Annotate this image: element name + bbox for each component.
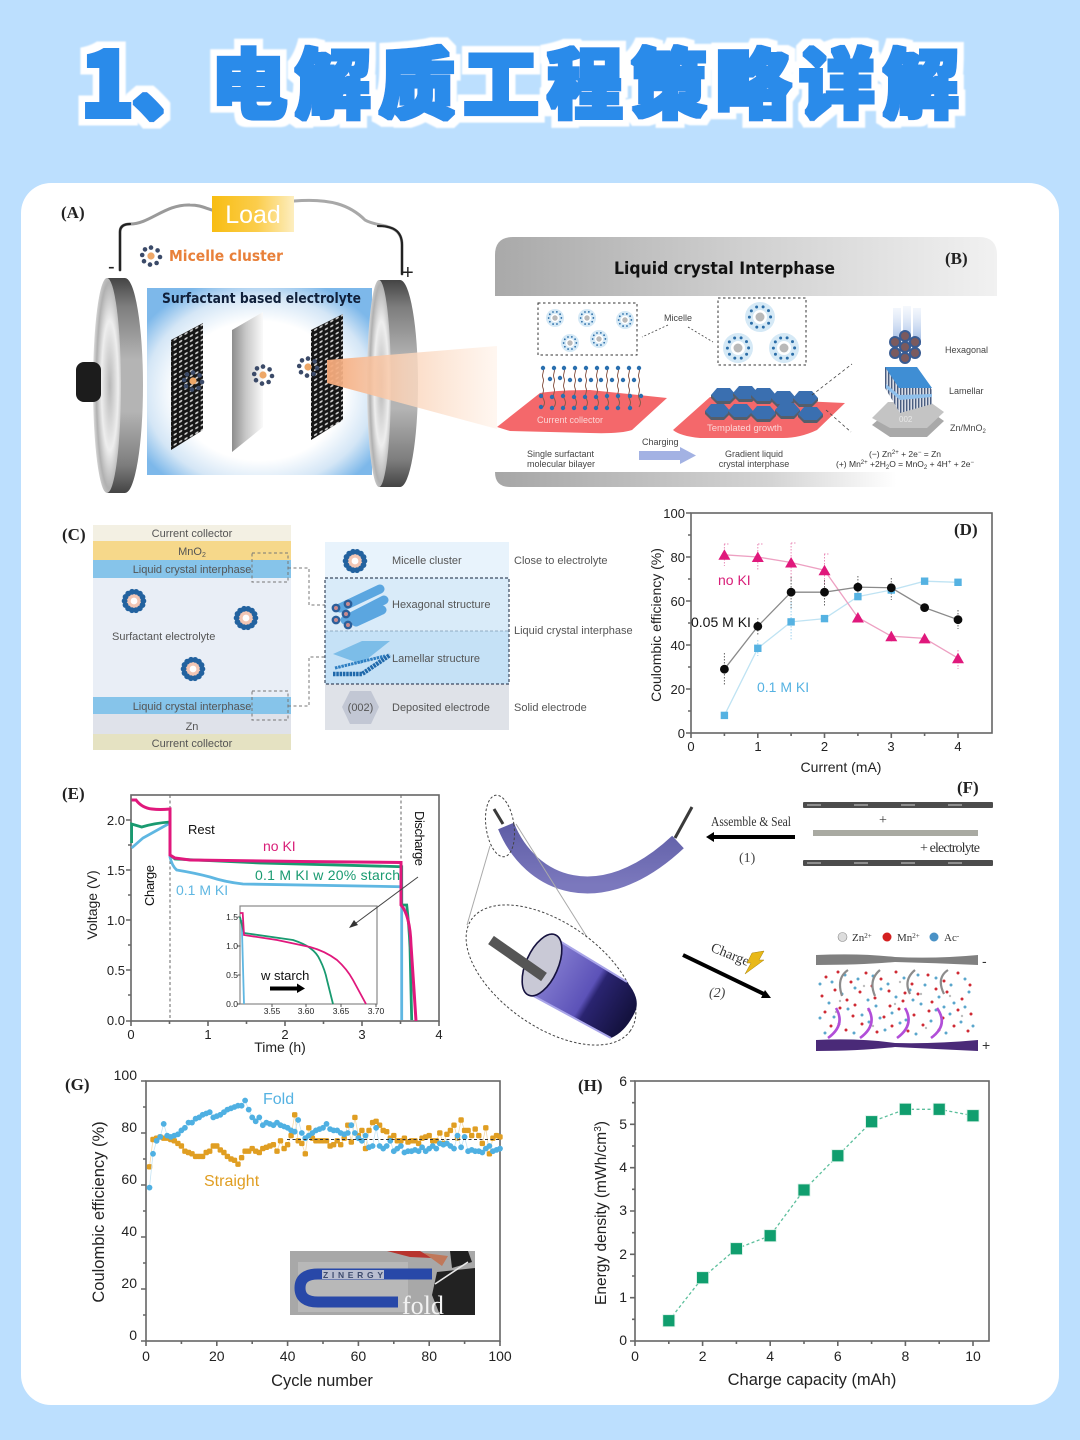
tick labels: 3 [887,739,895,754]
table row labels: Deposited electrode [392,702,490,714]
layered cell stack [93,525,291,750]
structure labels [945,345,988,435]
inset photo [290,1251,475,1320]
tick labels: 2.0 [107,813,125,828]
tick labels: 6 [834,1348,842,1364]
plate signs: - [982,953,987,969]
x axis title: Time (h) [254,1039,306,1055]
micelle label and pointers: Micelle [664,313,692,323]
tick labels: 10 [965,1348,981,1364]
inset chart: 0.0 [226,999,238,1009]
layered cell stack: MnO [178,546,202,558]
panel A: battery schematic [61,196,497,493]
large micelle box [718,298,806,365]
load box [212,196,294,232]
ion cloud [820,972,973,1034]
electrode equations: (−) Zn [869,449,892,459]
y axis title: Coulombic efficiency (%) [90,1121,108,1303]
reactant labels: + electrolyte [920,841,980,856]
labels: Charge [142,865,157,906]
cathode sheet [311,314,343,440]
structure labels: Hexagonal [945,345,988,355]
assemble arrow [706,815,795,866]
tick labels: 20 [671,682,685,697]
hexagonal crystals [705,386,823,423]
reference dashed line [287,1138,500,1140]
series labels: 0.05 M KI [691,614,751,630]
micelle cluster legend [140,245,284,267]
left knob [76,362,101,402]
electrode equations: = Zn [921,449,941,459]
inset chart: w starch [260,968,309,983]
circuit wires [120,200,402,274]
electrode equations: + [948,460,952,466]
ion legend: - [957,932,960,940]
layered cell stack: Current collector [152,738,233,750]
side labels: Solid electrode [514,702,587,714]
tick labels: 40 [671,638,685,653]
tick labels: 80 [671,550,685,565]
panel label C: (C) [62,525,86,544]
ion legend: Zn [852,932,864,944]
tick labels: 0 [687,739,695,754]
ion legend [838,932,960,944]
tick labels: 0 [129,1327,137,1343]
zoom beam to panel B [327,346,497,429]
tick labels: 0 [631,1348,639,1364]
panel G: cycling stability [65,1067,512,1390]
tick labels: 2 [619,1246,627,1262]
y axis title: Energy density (mWh/cm [593,1132,610,1305]
y axis title: 3 [593,1126,604,1132]
side labels: Liquid crystal interphase [514,625,633,637]
polarity signs: - [108,256,115,278]
electrolyte box [147,288,372,475]
electrolyte label: Surfactant electrolyte [112,631,215,643]
electrode equations: − [918,450,922,456]
surfactant bilayer [541,368,641,408]
series: no KI [724,555,958,658]
structure labels: 2 [983,429,987,435]
reactant labels: + [879,813,887,828]
labels: 0.1 M KI w 20% starch [255,867,400,883]
electrode equations: +2H [868,459,886,469]
icon: micelle cluster [346,552,364,570]
cathode plate [816,1039,978,1051]
panel H: energy density [578,1073,989,1389]
panel label H: (H) [578,1076,603,1095]
tick labels: 100 [663,506,685,521]
panel label F: (F) [957,778,979,797]
layered cell stack: Zn [186,721,198,733]
structure labels: Zn/MnO [950,423,983,433]
error bars [724,543,958,685]
icon: (002) hexagon: (002) [348,702,373,714]
caption: gradient interphase: Gradient liquid [725,449,783,459]
caption: bilayer: Single surfactant [527,449,594,459]
panel label D: (D) [954,520,978,539]
header band [495,237,997,296]
ion legend: 2+ [864,932,872,940]
ion legend: Mn [897,932,912,944]
inset chart: 1.5 [226,912,238,922]
footer band [495,472,997,487]
header title: Liquid crystal Interphase [614,259,835,279]
dashed pointers to stack [812,364,852,432]
templated growth substrate [673,397,845,438]
inset photo: ZINERGY [323,1270,383,1280]
tick labels: 4 [435,1027,443,1042]
tick labels: 1.5 [107,863,125,878]
x axis title: Current (mA) [801,759,881,775]
charging arrow: Charging [642,437,679,447]
tick labels: 60 [671,594,685,609]
table row labels: Micelle cluster [392,555,462,567]
axes [686,513,992,738]
reactant labels [879,813,980,856]
tick labels: 0 [142,1348,150,1364]
panel F: cable battery assembly [442,778,993,1073]
tick labels: 4 [954,739,962,754]
layered cell stack: Current collector [152,528,233,540]
lamellar stack [885,367,932,413]
y axis title: Voltage (V) [84,870,100,940]
deposited hexagons [872,402,944,437]
series: straight [150,1115,500,1167]
ion legend: Ac [944,932,957,944]
plate signs: + [982,1037,990,1053]
side labels: Close to electrolyte [514,555,608,567]
x axis title: Cycle number [271,1372,373,1390]
tick labels [619,1073,981,1364]
labels [142,811,427,906]
inset chart: 1.0 [226,941,238,951]
electrode equations: 2+ [892,450,899,456]
tick labels: 60 [121,1171,137,1187]
anode sheet [171,323,203,450]
tick labels: 100 [114,1067,137,1083]
caption: gradient interphase: crystal interphase [719,459,789,469]
hexagonal rods [890,306,921,363]
tick labels: 5 [619,1116,627,1132]
y axis title: ) [593,1121,610,1126]
labels: no KI [263,838,296,854]
electrode equations: O = MnO [889,459,924,469]
layered cell stack: Liquid crystal interphase [133,701,251,713]
icon: lamellar structure [333,641,390,674]
current collector: Current collector [537,415,603,425]
panel C: cell layers [62,525,633,750]
panel label G: (G) [65,1075,90,1094]
labels: Discharge [412,811,427,866]
tick labels [107,813,443,1042]
electrode equations: (+) Mn [836,459,861,469]
dashed connectors [252,553,325,720]
cylinder cutaway [491,928,637,1038]
charging arrow [639,437,696,464]
tick labels: 20 [121,1275,137,1291]
series: 0.1 M KI [724,581,958,715]
inset chart: 3.65 [333,1006,350,1016]
assemble arrow: Assemble & Seal [711,815,791,830]
charge arrow: Charge [709,941,751,970]
ion legend: 2+ [912,932,920,940]
migration arrows [828,970,948,1038]
electrode equations: 2 [886,465,890,471]
series labels [691,572,809,695]
tick labels: 1 [619,1289,627,1305]
charge arrow: (2) [709,986,726,1001]
series labels: Straight [204,1173,260,1190]
zoom guide lines [467,824,587,937]
title: 电解质工程策略详解 [211,24,967,134]
side labels [514,555,633,714]
small micelle box [538,303,637,355]
inset chart: 3.60 [298,1006,315,1016]
tick labels: 3 [358,1027,366,1042]
structure labels: Lamellar [949,386,984,396]
panel B: liquid crystal interphase [495,237,997,487]
dashed zoom ellipse [442,877,660,1073]
current collector [497,390,667,433]
curve: 0.1 M KI [132,823,402,1020]
tick labels [663,506,962,754]
deposited hexagons: 002 [899,415,913,424]
phase dividers [170,795,401,1021]
tick labels: 1 [204,1027,212,1042]
tick labels: 0 [678,726,685,741]
tick labels: 20 [209,1348,225,1364]
tick labels: 6 [619,1073,627,1089]
tick labels: 4 [619,1159,627,1175]
anode plate [816,954,978,965]
right current collector disc [367,280,418,487]
labels: Rest [188,822,215,837]
tick labels: 2 [821,739,828,754]
panel E: voltage vs time [62,784,443,1055]
tick labels: 2 [281,1027,289,1042]
reactant plates [803,802,993,866]
energy density series [669,1109,973,1321]
panel label A: (A) [61,203,85,222]
title: 、 [132,22,212,138]
inset chart: 3.70 [368,1006,385,1016]
inset photo: fold [402,1291,444,1320]
micelle label and pointers [642,313,713,342]
separator [232,312,263,452]
tick labels: 0.5 [107,963,125,978]
axes [126,795,439,1026]
electrode equations: + 2e [951,459,971,469]
electrode equations: − [970,460,974,466]
electrode equations: + 2e [899,449,918,459]
tick labels: 80 [121,1119,137,1135]
electrode equations: + 4H [927,459,948,469]
templated growth substrate: Templated growth [707,423,782,434]
callout arrow to inset [349,877,418,928]
electrode equations: 2 [924,465,928,471]
inset chart: 0.5 [226,970,238,980]
tick labels: 60 [351,1348,366,1364]
series labels: 0.1 M KI [757,679,809,695]
tick labels: 40 [280,1348,296,1364]
inset chart [226,906,385,1016]
left current collector disc [93,278,143,493]
series labels: no KI [718,572,751,588]
title: 1 [80,13,135,143]
electrolyte label: Surfactant based electrolyte [162,291,361,307]
series: fold [150,1100,500,1188]
polarity signs: + [402,262,414,284]
series labels [204,1091,294,1190]
tick labels [114,1067,512,1364]
tick labels: 3 [619,1202,627,1218]
curve: 0.1 M KI with starch [132,822,412,1020]
layered cell stack: 2 [202,552,206,559]
micelle cluster legend: Micelle cluster [169,247,284,265]
tick labels: 100 [488,1348,512,1364]
electrode equations: 2+ [861,460,868,466]
polarity signs [108,256,414,284]
cable tube [494,807,692,885]
micelles in electrolyte [125,592,255,678]
y axis title: Coulombic efficiency (%) [648,548,664,702]
caption: bilayer: molecular bilayer [527,459,595,469]
icon: hexagonal structure [333,589,384,628]
table row labels [392,555,490,714]
panel label E: (E) [62,784,85,803]
tick labels: 2 [699,1348,707,1364]
tick labels: 1.0 [107,913,125,928]
tick labels: 0.0 [107,1013,125,1028]
micelles on the sheets [182,356,319,392]
structure table [325,542,509,730]
assemble arrow: (1) [739,851,756,866]
axes [141,1081,500,1346]
tick labels: 0 [619,1332,627,1348]
tick labels: 4 [766,1348,774,1364]
inset chart: 3.55 [264,1006,281,1016]
plate signs [982,953,990,1053]
curve: no KI [132,800,416,1021]
tick labels: 8 [902,1348,910,1364]
x axis title: Charge capacity (mAh) [728,1371,896,1389]
axes [630,1081,989,1346]
panel D: coulombic efficiency vs current [648,506,992,775]
series: 0.05 M KI [724,587,958,669]
icon: (002) hexagon [342,691,379,724]
tick labels: 80 [421,1348,437,1364]
table row labels: Hexagonal structure [392,599,490,611]
tick labels: 1 [754,739,762,754]
tick labels: 40 [121,1223,137,1239]
table row labels: Lamellar structure [392,653,480,665]
panel label B: (B) [945,249,968,268]
dashed zoom circle [482,793,518,859]
labels: 0.1 M KI [176,882,228,898]
layered cell stack: Liquid crystal interphase [133,564,251,576]
series labels: Fold [263,1091,294,1108]
load box: Load [225,201,281,229]
charge arrow [683,941,771,1001]
tick labels: 0 [127,1027,135,1042]
